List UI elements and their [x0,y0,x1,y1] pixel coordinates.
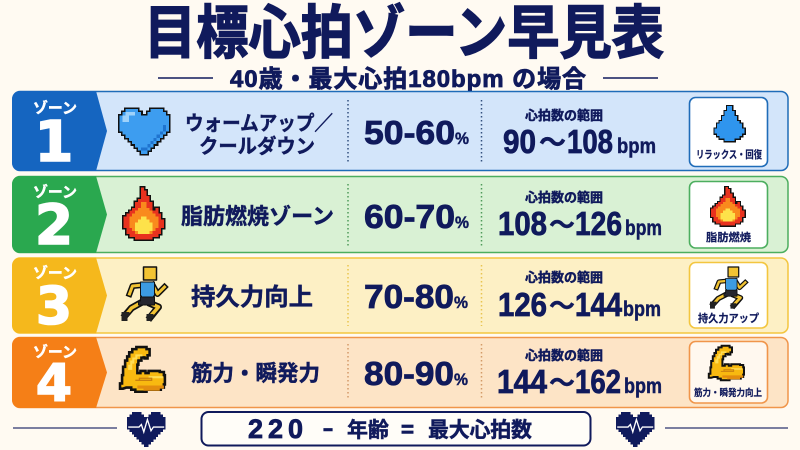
zone 4 percent: % [454,370,468,389]
icon: small flame [711,187,745,226]
zone 4 number: 4 [36,354,72,414]
zone 4 range: 162 [575,363,621,400]
zone 2 range: 心拍数の範囲 [525,187,603,206]
caption: 筋力・瞬発力向上 [694,385,762,399]
zone 2 range [498,187,662,242]
zone 4 label: ゾーン [33,341,77,362]
zone 2 range: 108 [498,205,547,242]
icon: small runner [710,267,745,309]
zone 2 name: 脂肪燃焼ゾーン [181,199,334,231]
caption: リラックス・回復 [696,147,762,162]
zone 1 range: ～ [539,121,566,160]
caption: 脂肪燃焼 [706,229,751,245]
zone 3 label: ゾーン [33,262,77,283]
zone 1 name [185,107,333,159]
zone 1 name: クールダウン [199,130,315,159]
zone 2 label: ゾーン [33,181,77,202]
zone 4 percent: 80-90 [364,355,454,392]
zone 1 range [503,105,656,160]
zone 1 label: ゾーン [33,97,77,118]
footer rule right [665,427,788,429]
formula text [248,414,532,444]
zone 3 badge [12,258,107,334]
icon: water drop [714,106,744,141]
icon: runner [122,267,164,321]
zone 4 range: ～ [549,363,575,400]
icon: flame [124,188,164,240]
panel: zone 1 [12,91,788,175]
zone 1 benefit card [690,98,768,166]
zone 3 range: 144 [575,286,623,323]
zone 3 range: 心拍数の範囲 [525,267,603,286]
zone 2 percent: 60-70 [364,198,455,235]
zone 1 range: 心拍数の範囲 [525,105,603,124]
zone 4 range: bpm [624,375,662,398]
zone 1 range: 108 [567,123,613,160]
icon: small flexed arm [709,346,744,380]
zone 1 range: bpm [617,135,656,158]
zone 4 badge [12,337,107,408]
footer rule left [13,427,117,429]
zone 2 percent: % [455,213,469,232]
formula text: 最大心拍数 [428,414,532,444]
zone 3 percent: 70-80 [364,278,454,315]
zone 3 number: 3 [36,277,72,337]
zone 2 benefit card [690,182,768,248]
zone 3 range: ～ [549,286,575,323]
zone 1 badge [12,91,107,171]
zone 2 range: bpm [625,217,662,240]
formula box [202,412,590,446]
zone 4 range [497,345,662,400]
zone 1 name: ウォームアップ／ [185,107,333,136]
zone 4 range: 144 [497,363,548,400]
formula text: = [401,417,414,442]
icon: blue heart [120,109,169,154]
zone 3 range [498,267,661,323]
zone 3 range: 126 [498,286,547,323]
formula text: 年齢 [347,414,389,444]
subtitle text: 40歳・最大心拍180bpm の場合 [230,66,586,93]
icon: ecg heart right [616,412,654,447]
icon: ecg heart left [127,412,165,447]
zone 1 percent: 50-60 [364,114,455,151]
formula text: − [323,417,333,442]
zone 2 number: 2 [35,193,73,257]
caption: 持久力アップ [698,310,759,326]
panel: zone 3 [12,258,788,337]
zone 2 range: ～ [549,205,575,242]
zone 1 range: 90 [503,123,536,160]
zone 2 badge [12,176,107,253]
zone 2 range: 126 [575,205,622,242]
zone 1 number: 1 [35,110,73,175]
formula text: 220 [248,414,303,444]
zone 1 percent: % [455,129,469,148]
panel: zone 2 [12,176,788,257]
panel: zone 4 [12,337,788,414]
icon: flexed arm [120,347,165,392]
zone 3 name: 持久力向上 [191,277,313,312]
zone 3 percent: % [454,293,468,312]
zone 3 benefit card [690,262,768,328]
zone 4 name: 筋力・瞬発力 [191,356,320,388]
zone 3 range: bpm [623,298,661,321]
zone 4 benefit card [690,342,768,403]
zone 4 range: 心拍数の範囲 [525,345,603,364]
